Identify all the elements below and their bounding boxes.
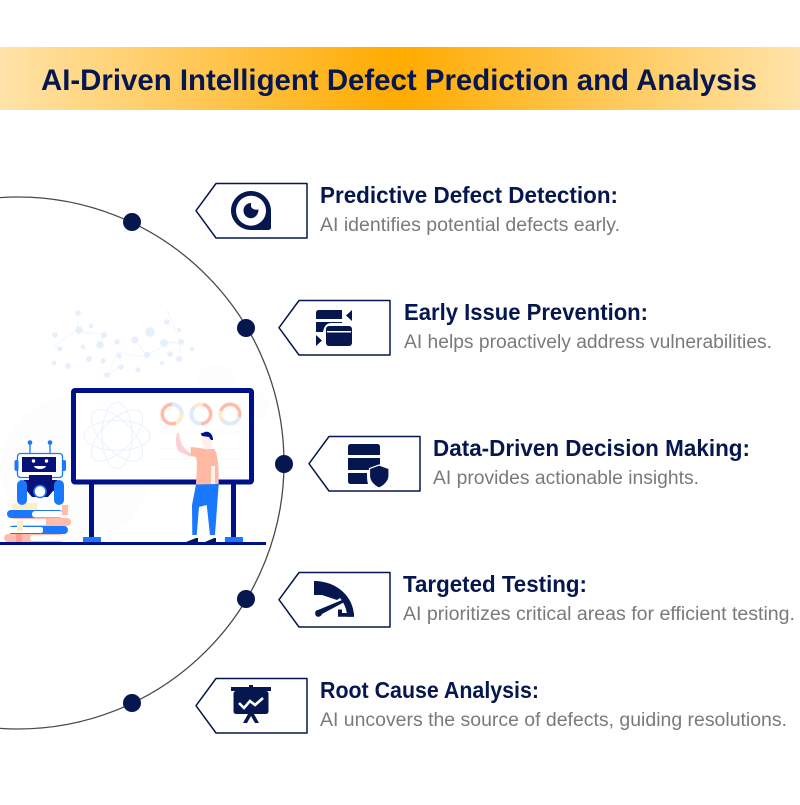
text: targeted testing: AI prioritizes critical areas for efficient testing. (403, 604, 795, 625)
text: targeted testing (403, 571, 795, 625)
atom graphic (83, 402, 151, 469)
tag with icon: eye (196, 184, 307, 238)
tag with icon: database shield (309, 436, 420, 491)
text: root cause analysis: Root Cause Analysis: (320, 677, 539, 703)
text: predictive defect detection: Predictive Defect Detection: (320, 182, 618, 208)
book stack (4, 503, 71, 542)
text: targeted testing: Targeted Testing: (403, 571, 587, 597)
title banner (0, 47, 800, 110)
donut charts (162, 404, 240, 424)
text: predictive defect detection: AI identifies potential defects early. (320, 215, 620, 236)
tag with icon: cards (279, 300, 390, 355)
illustration: robot and presenter at board (0, 310, 269, 545)
item 4: targeted testing (279, 571, 795, 627)
text: predictive defect detection (320, 182, 620, 236)
text: data-driven decision making: Data-Driven Decision Making: (433, 435, 750, 461)
item 3: data-driven decision making (309, 435, 750, 491)
text: data-driven decision making: AI provides actionable insights. (433, 468, 699, 489)
text: root cause analysis (320, 677, 787, 731)
text: early issue prevention: AI helps proactively address vulnerabilities. (404, 332, 772, 353)
text: early issue prevention (404, 299, 772, 353)
tag with icon: presentation chart (196, 678, 307, 733)
faint text lines (160, 432, 240, 478)
board legs and feet (83, 484, 243, 543)
text: root cause analysis: AI uncovers the source of defects, guiding resolutions. (320, 710, 787, 731)
text: data-driven decision making (433, 435, 750, 489)
orbit arc with node dots (0, 197, 293, 729)
presenter (176, 432, 219, 542)
faint background shapes (1, 365, 269, 544)
item 2: early issue prevention (279, 299, 772, 355)
tag with icon: gauge (279, 572, 390, 627)
presentation board (74, 390, 252, 543)
item 1: predictive defect detection (196, 182, 620, 238)
text: early issue prevention: Early Issue Prevention: (404, 299, 648, 325)
robot (14, 440, 66, 505)
title: AI-Driven Intelligent Defect Prediction and Analysis (41, 64, 757, 97)
ground line (0, 542, 266, 545)
item 5: root cause analysis (196, 677, 787, 733)
network of dots (52, 310, 194, 378)
